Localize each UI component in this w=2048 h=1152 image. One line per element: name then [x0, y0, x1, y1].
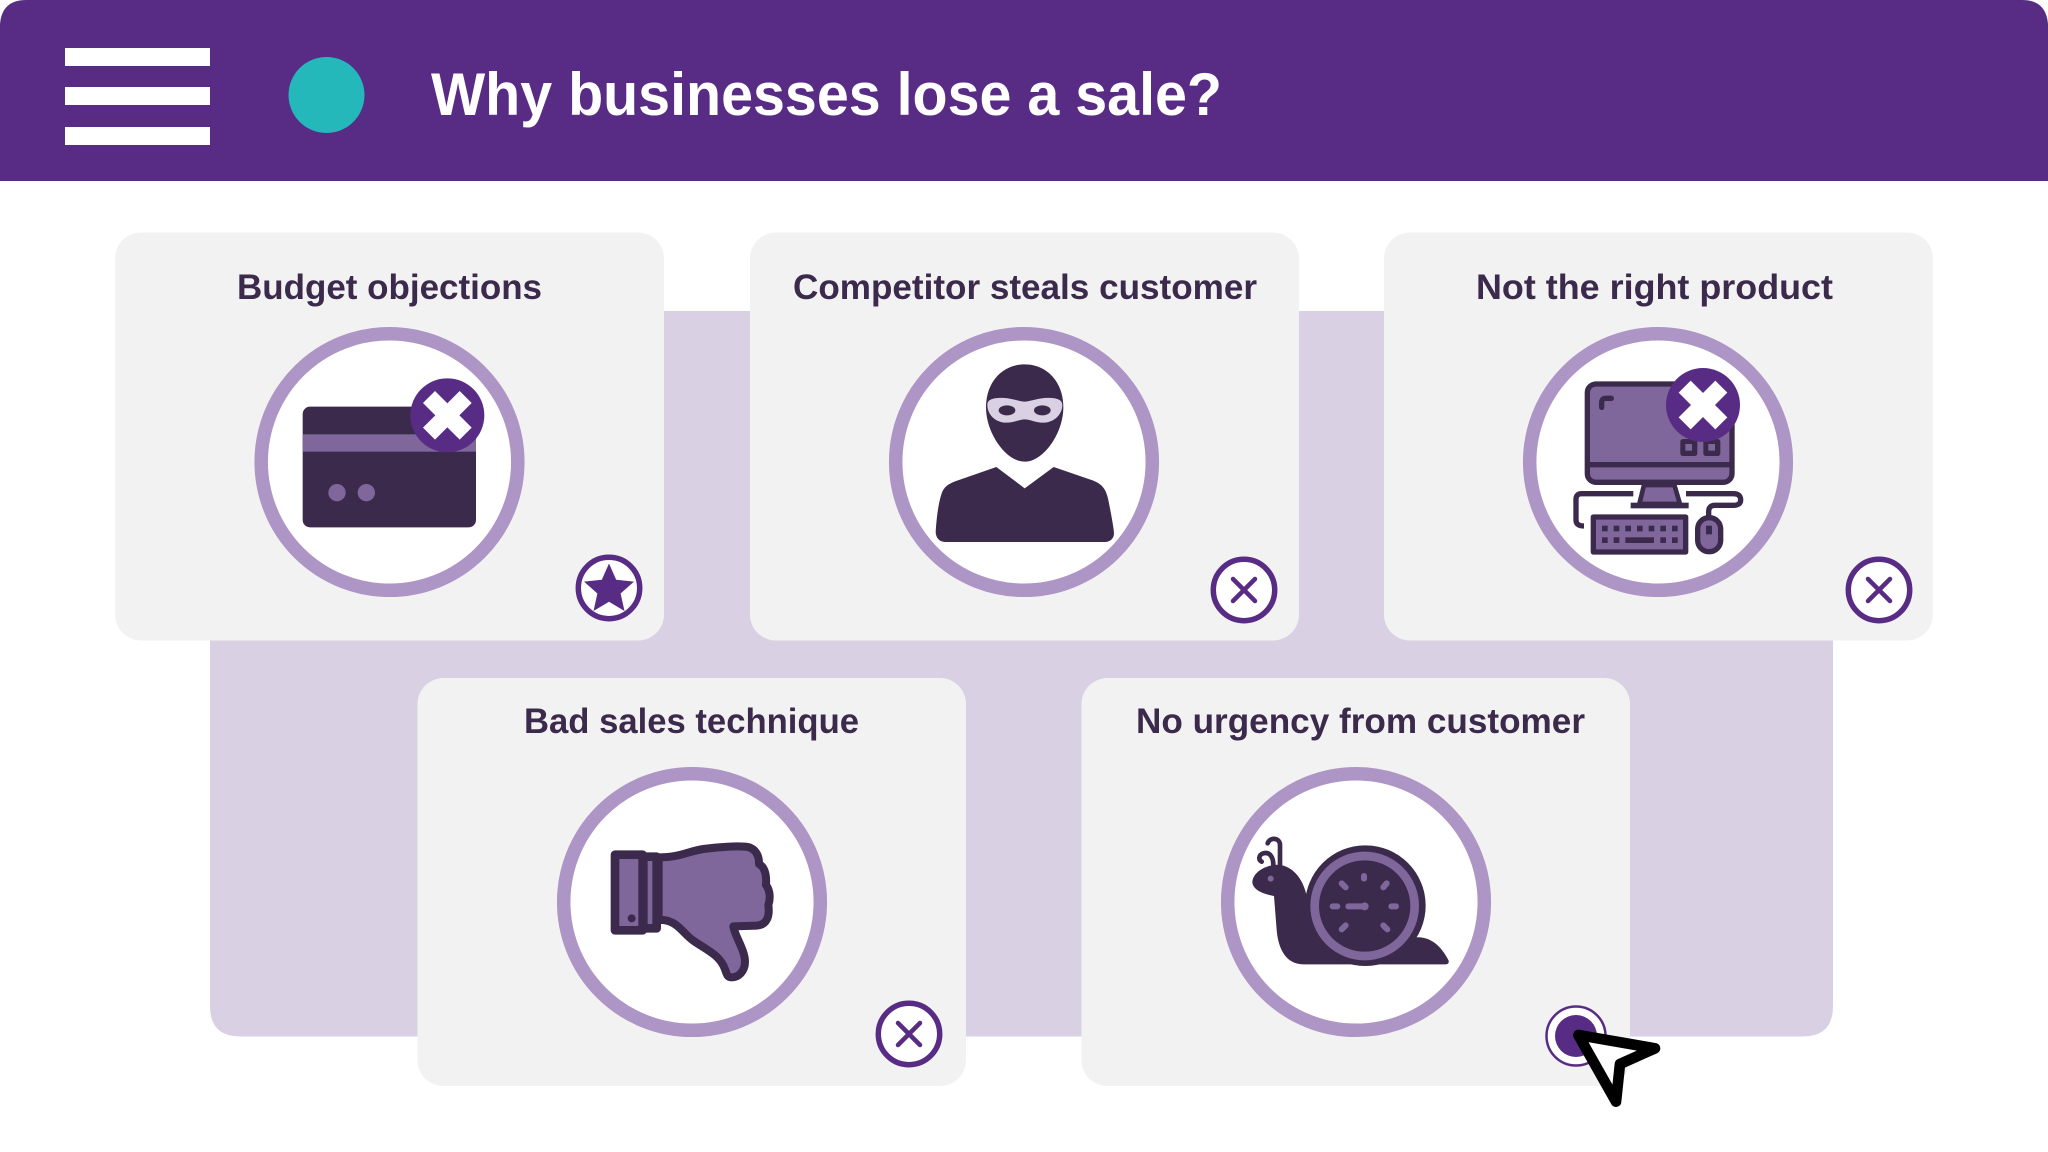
radio button: selected [1546, 1006, 1606, 1066]
icon: thumbs down [564, 774, 820, 1030]
icon: desktop computer with cross [1530, 334, 1786, 590]
panel: competitor steals customer [750, 232, 1299, 640]
heading: no urgency from customer: No urgency from customer [1136, 702, 1585, 741]
icon: cross badge [878, 1003, 940, 1065]
title: Why businesses lose a sale? [431, 61, 1222, 128]
heading: competitor steals customer: Competitor steals customer [793, 268, 1257, 307]
icon: cross badge [1848, 559, 1910, 621]
header bar [0, 0, 2048, 181]
heading: not the right product: Not the right product [1476, 268, 1833, 307]
panel: no urgency from customer [1082, 678, 1630, 1086]
icon: snail with speedometer shell [1228, 774, 1484, 1030]
icon: mouse cursor arrow [1578, 1035, 1655, 1102]
panel: budget objections [115, 232, 664, 640]
panel: not the right product [1384, 232, 1933, 640]
icon: star badge [578, 557, 640, 619]
icon: cross badge [1213, 559, 1275, 621]
panel: bad sales technique [418, 678, 966, 1086]
icon: masked thief [896, 334, 1152, 590]
icon: credit card with cross [261, 334, 518, 590]
lavender background panel [210, 311, 1833, 1036]
heading: budget objections: Budget objections [237, 268, 542, 307]
heading: bad sales technique: Bad sales technique [524, 702, 859, 741]
icon: teal status dot [288, 57, 364, 133]
icon: hamburger menu [65, 48, 210, 145]
